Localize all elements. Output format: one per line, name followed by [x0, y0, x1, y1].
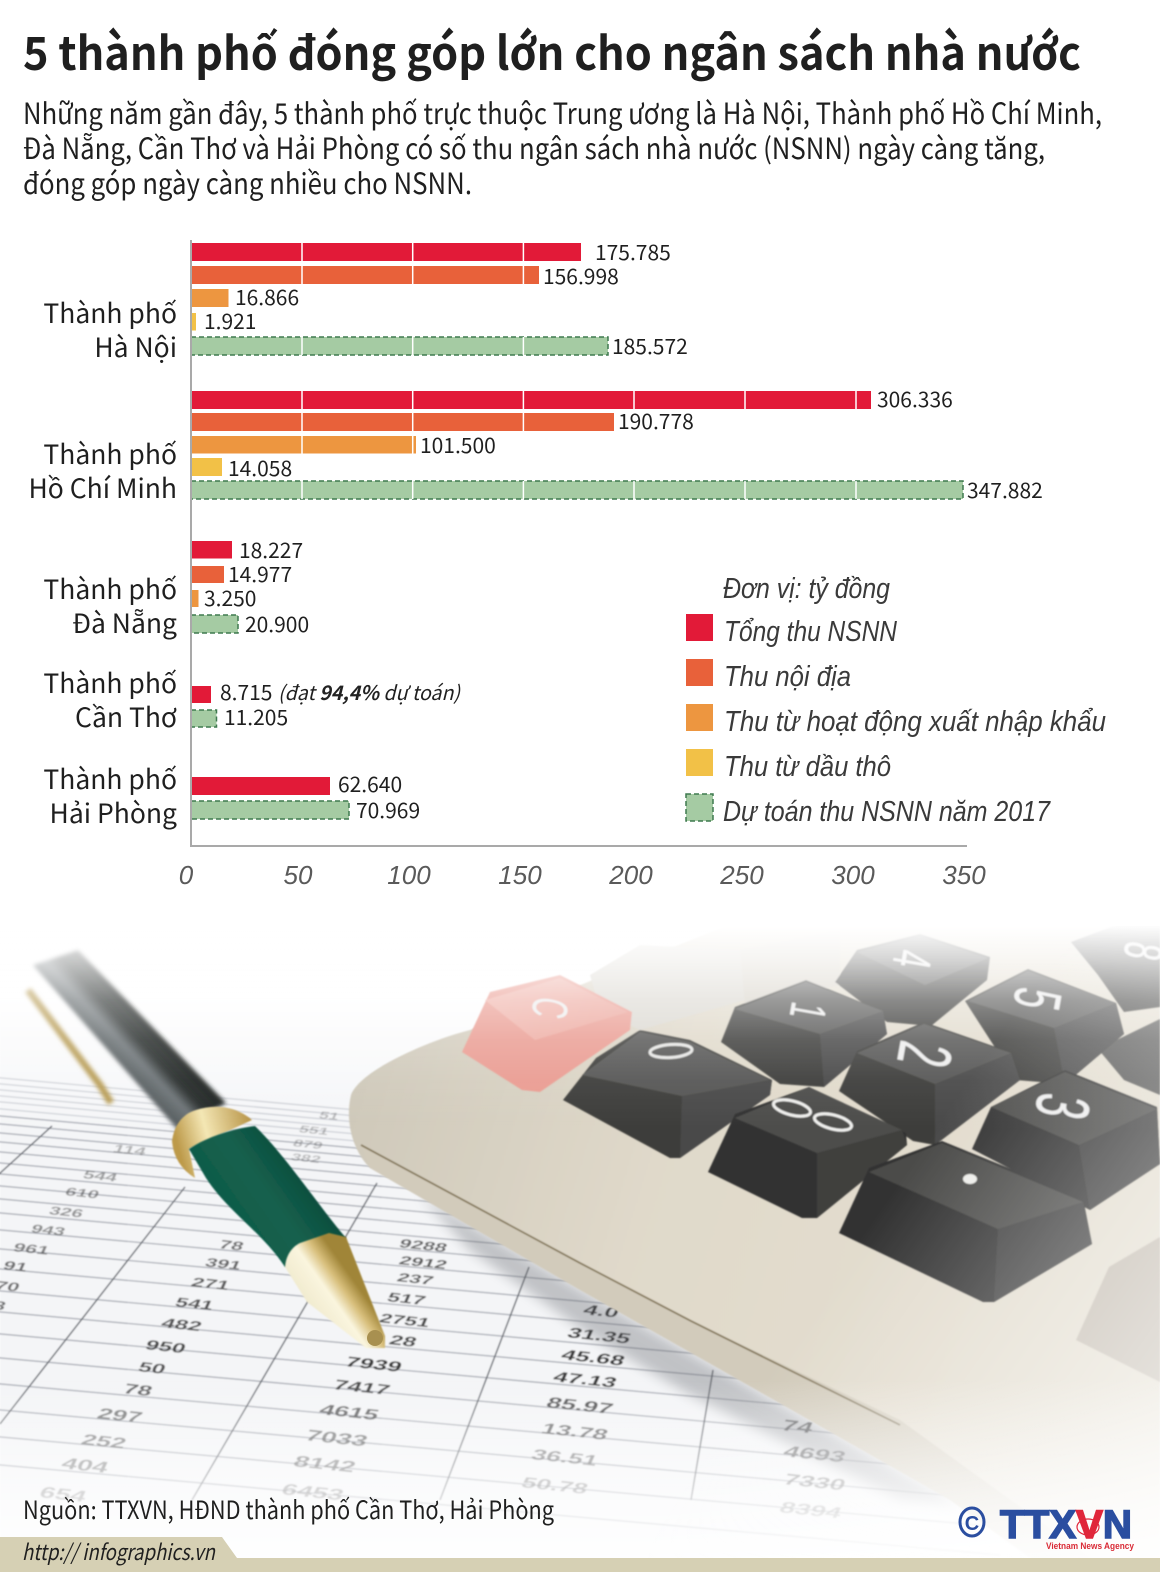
intro paragraph — [23, 91, 1102, 203]
logo: TTXVN — [960, 1503, 1135, 1552]
key: C pink: C — [520, 993, 580, 1023]
pen grip — [189, 1126, 346, 1267]
values: Hồ Chí Minh: 14.058 — [228, 453, 292, 483]
axis labels: 150 — [498, 860, 542, 890]
table figures: 7417 — [331, 1377, 393, 1398]
axes — [179, 240, 986, 890]
values: Hải Phòng: 62.640 — [338, 769, 402, 799]
city label: Đà Nẵng: Đà Nẵng — [72, 602, 177, 641]
agency tagline: Vietnam News Agency — [1046, 1541, 1135, 1552]
table figures: 4.0 — [581, 1302, 622, 1321]
table figures: 237 — [395, 1270, 436, 1287]
city label: Cần Thơ — [43, 662, 177, 735]
pen barrel — [33, 950, 226, 1130]
legend item: Dự toán thu NSNN năm 2017: Dự toán thu NSNN năm 2017 — [723, 796, 1052, 828]
key: large lower right — [1076, 1237, 1160, 1382]
bars: Cần Thơ — [191, 686, 216, 727]
city label: Hải Phòng: Hải Phòng — [50, 792, 177, 831]
calculator keys — [462, 918, 1160, 1382]
legend item: Thu từ hoạt động xuất nhập khẩu: Thu từ hoạt động xuất nhập khẩu — [724, 706, 1106, 738]
city label: Hà Nội: Thành phố — [43, 292, 177, 331]
table figures: 13.78 — [539, 1420, 611, 1443]
key: 1 — [721, 980, 887, 1087]
intro paragraph: Đà Nẵng, Cần Thơ và Hải Phòng có số thu ngân sách nhà nước (NSNN) ngày càng tăng, — [23, 126, 1045, 168]
axis labels: 50 — [284, 860, 313, 890]
city label: Hà Nội — [43, 292, 177, 365]
bar chart — [28, 237, 1043, 890]
table figures: 7330 — [781, 1470, 849, 1494]
table figures: 654 — [37, 1483, 90, 1505]
values: Đà Nẵng — [204, 535, 309, 639]
legend item: Tổng thu NSNN — [686, 614, 897, 648]
table figures: 31.35 — [565, 1325, 634, 1347]
bars: Đà Nẵng — [191, 541, 238, 633]
axis labels: 200 — [608, 860, 653, 890]
table figures: 610 — [63, 1185, 102, 1201]
values: Hà Nội: 185.572 — [612, 331, 688, 361]
key: 3 — [972, 1070, 1160, 1210]
table figures: 91 — [1, 1258, 31, 1274]
legend item: Thu từ dầu thô — [686, 749, 891, 783]
table figures: 879 — [291, 1138, 325, 1152]
table figures: 36.51 — [529, 1446, 601, 1469]
key: 2: 2 — [880, 1035, 968, 1073]
website url: http:// infographics.vn — [22, 1535, 216, 1567]
table figures: 45.68 — [559, 1347, 628, 1369]
photo fades — [0, 880, 1160, 1572]
key: 0 — [563, 1030, 772, 1158]
legend item: Tổng thu NSNN: Tổng thu NSNN — [724, 616, 897, 648]
table figures: 517 — [385, 1290, 428, 1308]
key: 5 — [965, 969, 1124, 1084]
bars: Hà Nội — [191, 243, 608, 355]
table figures: 8142 — [291, 1452, 359, 1476]
table figures: 271 — [189, 1275, 232, 1293]
table figures: 541 — [173, 1295, 216, 1313]
table figures: 74 — [779, 1416, 817, 1437]
values: Cần Thơ: 11.205 — [224, 702, 288, 732]
intro paragraph: đóng góp ngày càng nhiều cho NSNN. — [23, 161, 472, 203]
pen clip — [28, 990, 111, 1103]
bars: Hồ Chí Minh — [191, 391, 963, 499]
table figures: 2912 — [397, 1253, 450, 1272]
values: Hà Nội: 16.866 — [235, 282, 299, 312]
key: 4: 4 — [880, 946, 943, 973]
key: 4 — [835, 934, 990, 1026]
key: C pink — [462, 975, 632, 1092]
city label: Hồ Chí Minh: Thành phố — [43, 433, 177, 472]
table figures: 950 — [143, 1338, 189, 1356]
legend — [686, 573, 1106, 828]
key: 5: 5 — [999, 983, 1074, 1015]
values: Hồ Chí Minh: 306.336 — [877, 384, 953, 414]
table figures: 114 — [111, 1142, 150, 1158]
city label: Hải Phòng — [43, 758, 177, 831]
paper sheet with table rows — [0, 990, 1160, 1572]
table figures: 50.78 — [519, 1474, 591, 1497]
legend item: Thu nội địa — [686, 659, 851, 693]
pen ring — [172, 1107, 252, 1178]
values: Hà Nội: 175.785 — [595, 237, 671, 267]
table figures: 551 — [297, 1124, 331, 1138]
table figures: 78 — [217, 1237, 247, 1253]
table figures: 382 — [289, 1152, 323, 1166]
city label: Đà Nẵng — [43, 568, 177, 641]
values: Đà Nẵng: 14.977 — [228, 559, 292, 589]
unit note: Đơn vị: tỷ đồng — [723, 573, 890, 605]
pen tip — [285, 1233, 385, 1348]
city label: Hà Nội: Hà Nội — [94, 326, 177, 365]
values: Cần Thơ: (đạt 94,4% dự toán) — [278, 677, 461, 706]
table figures: 2751 — [377, 1311, 433, 1330]
table figures: 544 — [81, 1168, 121, 1184]
photo: pen and calculator on a financial sheet — [0, 880, 1160, 1572]
table figures: 961 — [11, 1240, 52, 1257]
table figures: 51 — [317, 1110, 341, 1123]
values: Hà Nội: 156.998 — [543, 261, 619, 291]
footer band — [0, 1535, 1160, 1572]
values: Hồ Chí Minh: 190.778 — [618, 406, 694, 436]
key: 3: 3 — [1018, 1087, 1106, 1125]
source note: Nguồn: TTXVN, HĐND thành phố Cần Thơ, Hải Phòng — [23, 1491, 554, 1527]
table figures: 4615 — [317, 1401, 382, 1423]
calculator shadow — [420, 1195, 960, 1505]
city label: Hồ Chí Minh: Hồ Chí Minh — [28, 467, 177, 506]
table figures: 9288 — [397, 1236, 450, 1255]
table figures: 326 — [47, 1204, 86, 1220]
city label: Hồ Chí Minh — [28, 433, 177, 506]
copyright mark: C — [965, 1513, 979, 1535]
table figures: 4693 — [781, 1442, 849, 1466]
values: Hồ Chí Minh — [228, 384, 1043, 505]
values: Hà Nội — [204, 237, 688, 361]
table figures: 391 — [203, 1255, 244, 1272]
table figures: 8394 — [777, 1498, 845, 1522]
values: Hải Phòng — [338, 769, 420, 825]
globe emblem — [1077, 1519, 1099, 1535]
values: Đà Nẵng: 18.227 — [239, 535, 303, 565]
group: Hà Nội — [43, 237, 688, 365]
city label: Cần Thơ: Cần Thơ — [75, 696, 177, 735]
group: Cần Thơ — [43, 662, 461, 735]
table figures: 252 — [79, 1431, 129, 1452]
calculator body — [349, 900, 1160, 1572]
values: Cần Thơ: 8.715 — [220, 677, 272, 707]
legend item: Thu nội địa: Thu nội địa — [724, 661, 851, 693]
axis labels: 300 — [831, 860, 875, 890]
table figures: 47.13 — [551, 1369, 620, 1391]
table figures: 7033 — [303, 1426, 371, 1450]
axis labels: 0 — [179, 860, 194, 890]
values: Hải Phòng: 70.969 — [356, 795, 420, 825]
values: Hà Nội: 1.921 — [204, 306, 256, 336]
agency wordmark: TTXVN — [1000, 1503, 1132, 1547]
legend item: Thu từ dầu thô: Thu từ dầu thô — [724, 751, 891, 783]
bars: Hải Phòng — [191, 777, 349, 819]
table figures: 7939 — [343, 1354, 405, 1375]
key: 6 — [1098, 1019, 1160, 1095]
group: Đà Nẵng — [43, 535, 309, 641]
table figures: 297 — [95, 1405, 145, 1426]
table figures: 6453 — [279, 1480, 347, 1504]
axis labels: 100 — [387, 860, 431, 890]
key: 2 — [839, 1022, 1020, 1145]
table figures: 85.97 — [544, 1394, 616, 1417]
table figures: 482 — [159, 1316, 205, 1334]
key: 8 — [1071, 918, 1160, 1012]
table figures: 78 — [121, 1381, 155, 1399]
table figures: 28 — [387, 1333, 419, 1350]
axis labels: 350 — [942, 860, 986, 890]
axis labels — [179, 860, 986, 890]
table figures — [0, 1110, 849, 1522]
values: Đà Nẵng: 3.250 — [204, 583, 256, 613]
city label: Hải Phòng: Thành phố — [43, 758, 177, 797]
key: 1: 1 — [779, 998, 837, 1024]
table figures: 943 — [29, 1222, 68, 1238]
values: Hồ Chí Minh: 101.500 — [420, 430, 496, 460]
key: decimal point — [839, 1141, 1092, 1302]
city label: Đà Nẵng: Thành phố — [43, 568, 177, 607]
pen — [28, 950, 385, 1348]
axis labels: 250 — [719, 860, 764, 890]
values: Cần Thơ — [220, 677, 461, 732]
city label: Cần Thơ: Thành phố — [43, 662, 177, 701]
key: 00 — [708, 1087, 907, 1218]
copyright mark — [960, 1508, 984, 1536]
table figures: 50 — [136, 1360, 168, 1377]
key: light grey function keys — [590, 930, 840, 1030]
table figures: 404 — [59, 1454, 112, 1476]
group: Hải Phòng — [43, 758, 420, 831]
values: Đà Nẵng: 20.900 — [245, 609, 309, 639]
group: Hồ Chí Minh — [28, 384, 1043, 506]
title: 5 thành phố đóng góp lớn cho ngân sách nhà nước — [23, 18, 1081, 84]
values: Hồ Chí Minh: 347.882 — [967, 475, 1043, 505]
